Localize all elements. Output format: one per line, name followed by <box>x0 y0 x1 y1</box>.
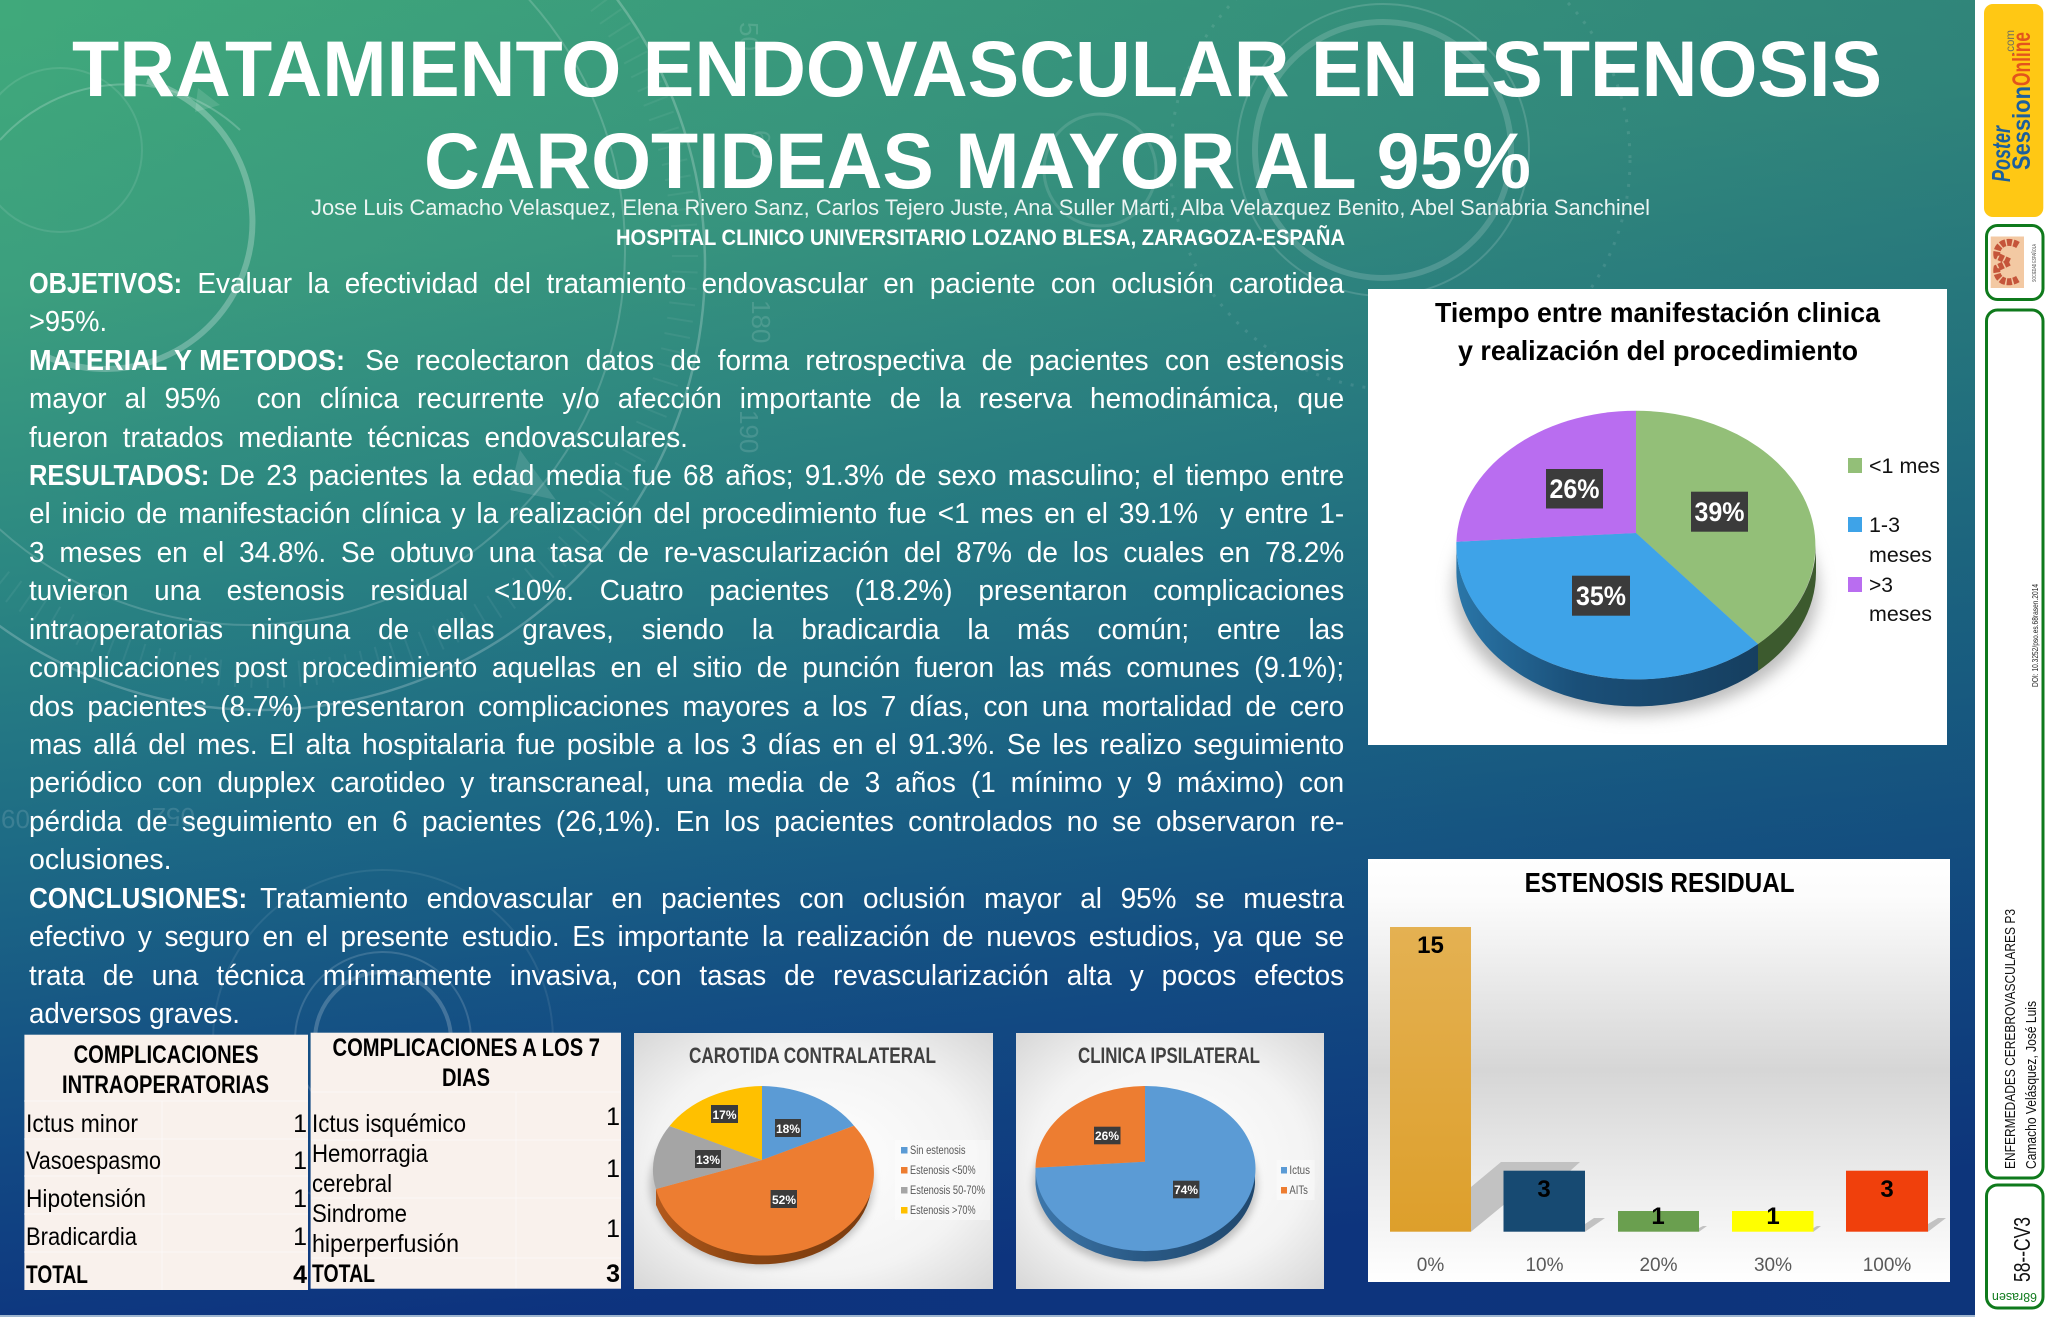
bar values: 15 <box>1417 932 1444 959</box>
panel: carotida contralateral <box>634 1033 993 1289</box>
clinica labels: 26% <box>1095 1129 1119 1143</box>
box: poster code: 58--CV3 <box>2009 1217 2035 1282</box>
body text: objetivos, material y metodos, resultados, conclusiones: complicaciones post procedimiento aquellas en el sitio de punción fueron las más comunes (9.1%); <box>29 652 1344 684</box>
body text: objetivos, material y metodos, resultados, conclusiones: trata de una técnica mínimamente invasiva, con tasas de revascularización alta y pocos efectos <box>29 960 1344 992</box>
bar categories: 30% <box>1754 1255 1792 1276</box>
body text: objetivos, material y metodos, resultados, conclusiones: oclusiones. <box>29 844 172 876</box>
body text: objetivos, material y metodos, resultados, conclusiones: RESULTADOS: <box>29 460 209 492</box>
pie legend: <1 mes <box>1869 455 1940 478</box>
table: complicaciones intraoperatorias: TOTAL <box>26 1261 88 1289</box>
table: complicaciones a los 7 dias: DIAS <box>442 1064 490 1092</box>
sidebar: poster session online <box>1975 0 2048 1317</box>
table: complicaciones a los 7 dias: Sindrome <box>312 1200 407 1228</box>
body text: objetivos, material y metodos, resultados, conclusiones: pérdida de seguimiento en 6 pacientes (26,1%). En los pacientes controlados no se observaron re- <box>29 806 1344 838</box>
table: complicaciones a los 7 dias: 3 <box>606 1260 620 1288</box>
bar values: 1 <box>1651 1203 1665 1230</box>
body text: objetivos, material y metodos, resultados, conclusiones: OBJETIVOS: <box>29 268 182 300</box>
body text: objetivos, material y metodos, resultados, conclusiones: De 23 pacientes la edad media fue 68 años; 91.3% de sexo masculino; el tiempo entre <box>219 460 1344 492</box>
authors and hospital <box>311 195 1650 250</box>
table: complicaciones a los 7 dias: TOTAL <box>312 1260 375 1288</box>
table: complicaciones intraoperatorias: 1 <box>293 1147 307 1175</box>
carotida title: CAROTIDA CONTRALATERAL <box>689 1043 936 1068</box>
authors and hospital: HOSPITAL CLINICO UNIVERSITARIO LOZANO BLESA, ZARAGOZA-ESPAÑA <box>616 225 1345 250</box>
body text: objetivos, material y metodos, resultados, conclusiones: Tratamiento endovascular en pacientes con oclusión mayor al 95% se muestra <box>260 883 1344 915</box>
box: poster code: 68rasen <box>1992 1290 2037 1305</box>
body text: objetivos, material y metodos, resultados, conclusiones: dos pacientes (8.7%) presentaron complicaciones mayores a los 7 días, con una mortalidad de cero <box>29 691 1344 723</box>
body text: objetivos, material y metodos, resultados, conclusiones: efectivo y seguro en el presente estudio. Es importante la realización de nuevos estudios, ya que se <box>29 921 1344 953</box>
pie shadow <box>1454 465 1818 715</box>
carotida labels: 17% <box>712 1108 737 1122</box>
logo: posterSessionOnline <box>1984 4 2043 217</box>
table: complicaciones intraoperatorias <box>24 1035 308 1290</box>
table: complicaciones a los 7 dias: COMPLICACIONES A LOS 7 <box>332 1034 600 1062</box>
carotida legend: Estenosis 50-70% <box>910 1185 985 1197</box>
table: complicaciones a los 7 dias: 1 <box>606 1155 620 1183</box>
box: session and authors: Camacho Velásquez, José Luis <box>2023 1001 2040 1169</box>
carotida labels: 13% <box>696 1153 720 1167</box>
table: complicaciones a los 7 dias <box>311 1033 621 1289</box>
bar categories: 20% <box>1639 1255 1678 1276</box>
carotida legend: Estenosis <50% <box>910 1165 976 1177</box>
pie slices <box>1456 411 1816 706</box>
pie legend: 1-3 <box>1869 514 1900 537</box>
pie legend: meses <box>1869 603 1932 626</box>
bar values: 1 <box>1766 1203 1780 1230</box>
bar categories: 100% <box>1863 1255 1911 1276</box>
body text: objetivos, material y metodos, resultados, conclusiones: mayor al 95% con clínica recurrente y/o afección importante de la reserva hemodinámica, que <box>29 383 1344 415</box>
pie legend: >3 <box>1869 574 1893 597</box>
body text: objetivos, material y metodos, resultados, conclusiones: mas allá del mes. El alta hospitalaria fue posible a los 3 días en el 91.3%. Se les realizo seguimiento <box>29 729 1344 761</box>
table: complicaciones intraoperatorias: Bradicardia <box>26 1223 137 1251</box>
carotida legend: Sin estenosis <box>910 1145 966 1157</box>
background: 052 <box>152 802 195 832</box>
carotida labels <box>695 1105 801 1208</box>
table: complicaciones a los 7 dias: 1 <box>606 1103 620 1131</box>
body text: objetivos, material y metodos, resultados, conclusiones: fueron tratados mediante técnicas endovasculares. <box>29 422 688 454</box>
table: complicaciones a los 7 dias: hiperperfusión <box>312 1230 459 1258</box>
body text: objetivos, material y metodos, resultados, conclusiones: >95%. <box>29 306 107 338</box>
carotida labels: 52% <box>772 1193 796 1207</box>
table: complicaciones intraoperatorias: 4 <box>293 1261 307 1289</box>
panel: clinica ipsilateral <box>1016 1033 1324 1289</box>
body text: objetivos, material y metodos, resultados, conclusiones: Se recolectaron datos de forma retrospectiva de pacientes con estenosis <box>365 345 1344 377</box>
table: complicaciones intraoperatorias: 1 <box>293 1185 307 1213</box>
clinica legend <box>1277 1160 1315 1200</box>
box: poster code <box>1986 1185 2043 1308</box>
bar chart title: ESTENOSIS RESIDUAL <box>1525 867 1795 898</box>
body text: objetivos, material y metodos, resultados, conclusiones: adversos graves. <box>29 998 240 1030</box>
pie labels: 39% <box>1694 497 1744 527</box>
logo box: congress brain: SOCIEDAD ESPAÑOLA <box>2031 244 2038 282</box>
clinica labels <box>1094 1127 1199 1198</box>
bar values: 3 <box>1537 1176 1551 1203</box>
body text: objetivos, material y metodos, resultados, conclusiones <box>29 268 1344 1030</box>
bar categories <box>1417 1255 1911 1276</box>
table: complicaciones intraoperatorias: 1 <box>293 1223 307 1251</box>
background: 180 <box>746 300 776 343</box>
table: complicaciones a los 7 dias: 1 <box>606 1215 620 1243</box>
authors and hospital: Jose Luis Camacho Velasquez, Elena Rivero Sanz, Carlos Tejero Juste, Ana Suller Marti, Alba Velazquez Benito, Abel Sanabria Sanchinel <box>311 195 1650 220</box>
clinica legend: Ictus <box>1289 1165 1310 1177</box>
panel: pie chart tiempo entre manifestacion <box>1368 289 1947 745</box>
body text: objetivos, material y metodos, resultados, conclusiones: 3 meses en el 34.8%. Se obtuvo una tasa de re-vascularización del 87% de los cuales en 78.2% <box>29 537 1344 569</box>
panel: bar chart estenosis residual <box>1368 859 1950 1282</box>
carotida legend <box>895 1140 990 1220</box>
box: session and authors: DOI: 10.3252/pso.es.68rasen.2014 <box>2031 584 2040 687</box>
body text: objetivos, material y metodos, resultados, conclusiones: MATERIAL Y METODOS: <box>29 345 345 377</box>
clinica pie <box>1033 1086 1257 1267</box>
logo: posterSessionOnline: Online <box>2008 32 2036 86</box>
background: 50 <box>734 22 764 51</box>
table: complicaciones a los 7 dias: Hemorragia <box>312 1140 428 1168</box>
bar values <box>1417 932 1894 1230</box>
bar values: 3 <box>1880 1176 1894 1203</box>
background: 60 <box>746 130 776 159</box>
body text: objetivos, material y metodos, resultados, conclusiones: periódico con dupplex carotideo y transcraneal, una media de 3 años (1 mínimo y 9 máximo) con <box>29 767 1344 799</box>
bar categories: 10% <box>1525 1255 1564 1276</box>
table: complicaciones intraoperatorias: Vasoespasmo <box>26 1147 161 1175</box>
carotida labels: 18% <box>776 1122 800 1136</box>
bars <box>1390 927 1928 1232</box>
pie labels <box>1546 469 1748 616</box>
table: complicaciones intraoperatorias: Ictus minor <box>26 1110 138 1138</box>
body text: objetivos, material y metodos, resultados, conclusiones: el inicio de manifestación clínica y la realización del procedimiento fue <1 mes en el 39.1% y entre 1- <box>29 498 1344 530</box>
title <box>72 24 1882 205</box>
pie legend: meses <box>1869 544 1932 567</box>
logo box: congress brain <box>1986 226 2043 300</box>
table: complicaciones intraoperatorias: 1 <box>293 1110 307 1138</box>
table: complicaciones intraoperatorias: Hipotensión <box>26 1185 146 1213</box>
bar shadows <box>1471 1162 1946 1232</box>
clinica title: CLINICA IPSILATERAL <box>1078 1043 1260 1068</box>
logo: posterSessionOnline: Poster <box>1986 125 2016 182</box>
logo: posterSessionOnline: .com <box>2003 30 2017 55</box>
table: complicaciones a los 7 dias: Ictus isquémico <box>312 1110 466 1138</box>
chart title: y realización del procedimiento <box>1458 335 1858 366</box>
body text: objetivos, material y metodos, resultados, conclusiones: tuvieron una estenosis residual <10%. Cuatro pacientes (18.2%) presentaron complicaciones <box>29 575 1344 607</box>
table: complicaciones intraoperatorias: COMPLICACIONES <box>74 1041 259 1069</box>
carotida legend: Estenosis >70% <box>910 1205 976 1217</box>
background: 190 <box>734 410 764 453</box>
table: complicaciones a los 7 dias: cerebral <box>312 1170 392 1198</box>
pie labels: 26% <box>1550 474 1600 504</box>
clinica legend: AITs <box>1289 1185 1308 1197</box>
pie legend <box>1848 455 1940 626</box>
pie labels: 35% <box>1576 581 1626 611</box>
logo: posterSessionOnline: Session <box>2008 86 2036 170</box>
clinica labels: 74% <box>1174 1183 1198 1197</box>
table: complicaciones intraoperatorias: INTRAOPERATORIAS <box>62 1071 269 1099</box>
box: session and authors: ENFERMEDADES CEREBROVASCULARES P3 <box>2002 909 2019 1169</box>
carotida pie <box>650 1086 874 1267</box>
bar categories: 0% <box>1417 1255 1444 1276</box>
title: TRATAMIENTO ENDOVASCULAR EN ESTENOSIS <box>72 24 1882 113</box>
body text: objetivos, material y metodos, resultados, conclusiones: Evaluar la efectividad del tratamiento endovascular en paciente con oclusión carotidea <box>197 268 1344 300</box>
body text: objetivos, material y metodos, resultados, conclusiones: CONCLUSIONES: <box>29 883 247 915</box>
title: CAROTIDEAS MAYOR AL 95% <box>424 116 1531 205</box>
chart title: Tiempo entre manifestación clinica <box>1435 297 1880 328</box>
body text: objetivos, material y metodos, resultados, conclusiones: intraoperatorias ninguna de ellas graves, siendo la bradicardia la más común; entre las <box>29 614 1344 646</box>
chart title <box>1435 297 1880 366</box>
box: session and authors <box>1986 310 2043 1178</box>
